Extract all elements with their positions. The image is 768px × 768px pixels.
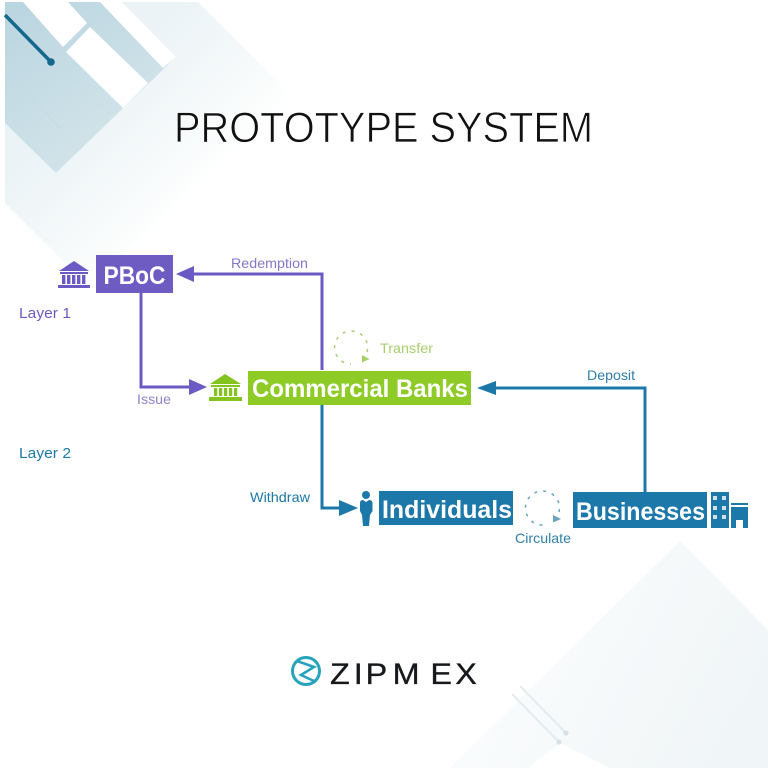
icon: PBoC bank: [58, 261, 90, 288]
box: Businesses: Businesses: [576, 498, 705, 526]
logo: Zipmex: ZIPMEX: [330, 657, 477, 691]
label: Layer 2: Layer 2: [19, 446, 71, 462]
box: PBoC: [96, 255, 173, 293]
label: Redemption: Redemption: [231, 255, 308, 271]
icon: transfer cycle: [335, 331, 370, 364]
arrow: issue: [141, 293, 207, 395]
label: Layer 1: Layer 1: [19, 306, 71, 322]
arrow: deposit: [477, 381, 645, 492]
label: Transfer: Transfer: [380, 340, 433, 356]
decoration: top-left diamonds: [5, 2, 290, 289]
label: Circulate: Circulate: [515, 530, 571, 546]
title: PROTOTYPE SYSTEM: [174, 104, 593, 152]
arrow: redemption: [176, 266, 322, 370]
icon: buildings: [711, 492, 748, 528]
icon: person: [360, 491, 372, 526]
icon: circulate cycle: [525, 491, 561, 525]
box: Individuals: Individuals: [382, 496, 512, 524]
arrow: withdraw: [322, 405, 358, 516]
label: Deposit: Deposit: [587, 367, 635, 383]
box: PBoC: PBoC: [104, 262, 166, 290]
label: Withdraw: Withdraw: [250, 489, 311, 505]
decoration: bottom-right diamond: [450, 541, 768, 768]
icon: Commercial Banks bank: [209, 374, 242, 401]
label: Issue: Issue: [137, 391, 171, 407]
box: Commercial Banks: Commercial Banks: [252, 375, 468, 403]
